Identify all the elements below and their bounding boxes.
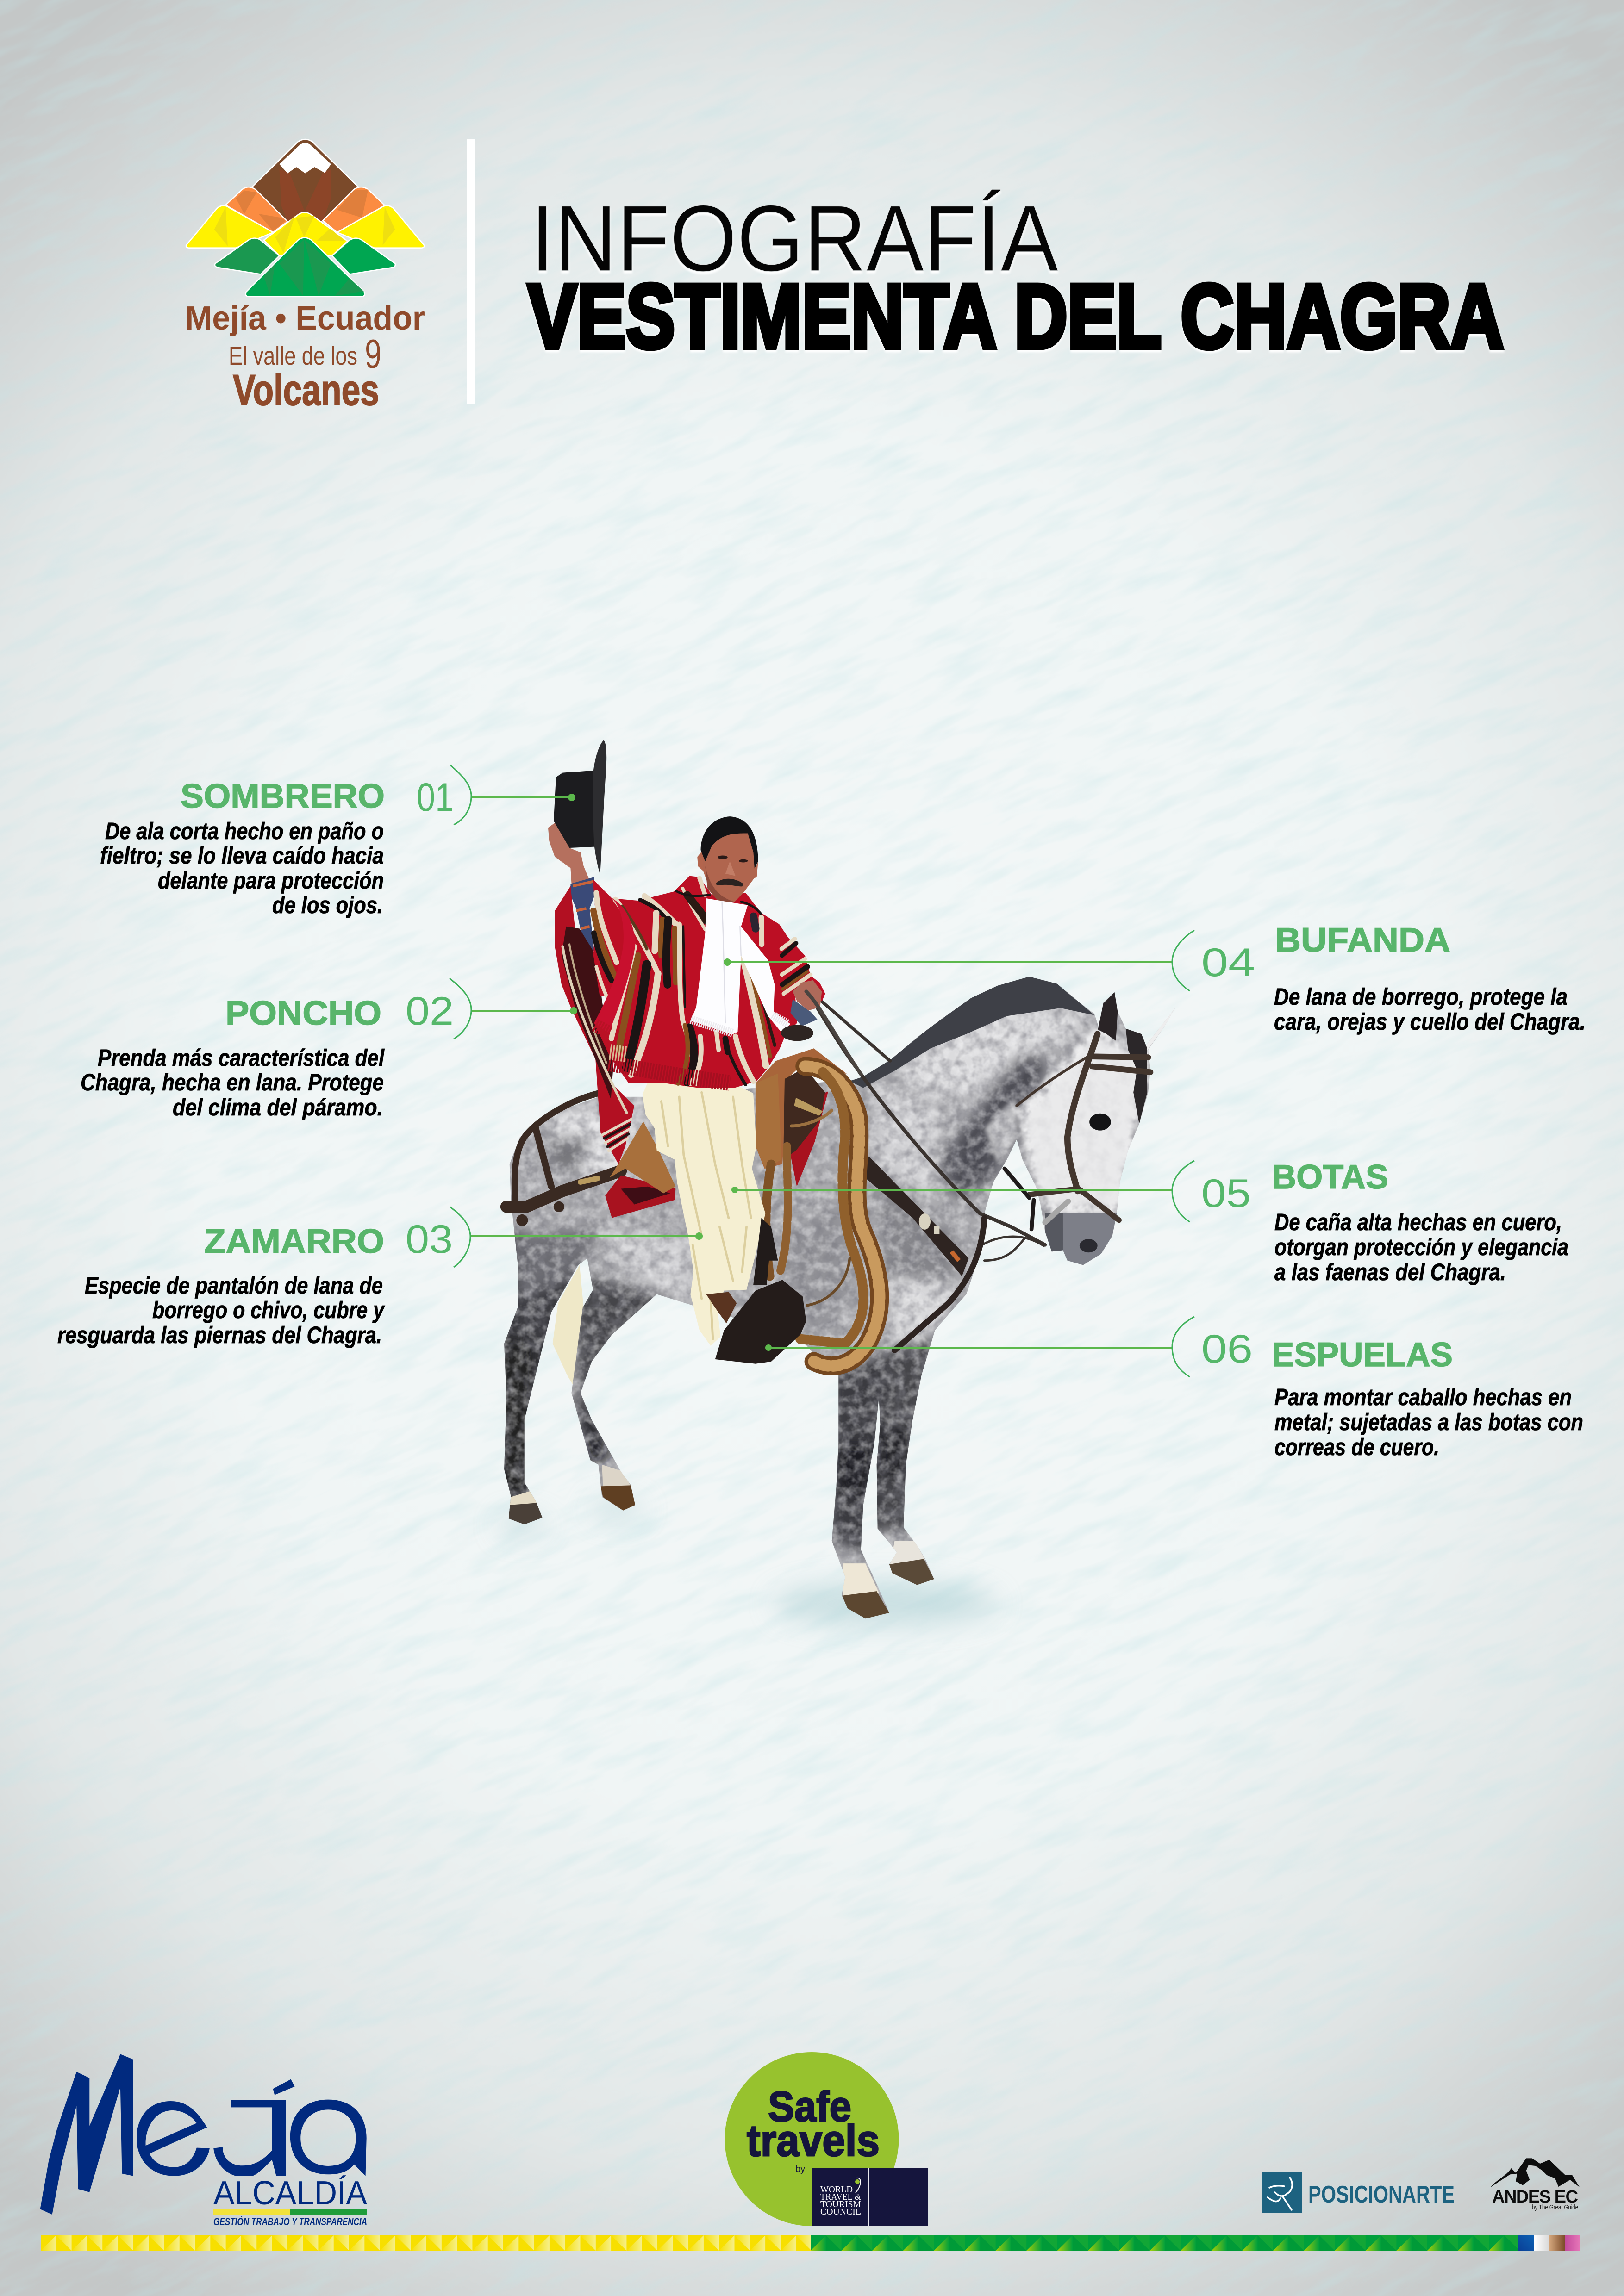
text: by: by [795,2164,805,2174]
title [528,186,1504,367]
collar cord [676,891,761,914]
description: resguarda las piernas del Chagra. [57,1322,382,1348]
description: Prenda más característica del [98,1045,385,1071]
illustration: chagra rider on dapple-grey horse [491,740,1191,1630]
leader line [450,1207,703,1267]
heading: BUFANDA [1275,921,1450,959]
leader line [450,765,575,825]
description: otorgan protección y elegancia [1274,1234,1568,1260]
fetlocks and hooves [510,1489,538,1505]
text: World Travel & Tourism Council [820,2184,861,2217]
number: 03 [406,1217,453,1262]
poncho main body [593,876,825,1088]
text: ALCALDÍA: ALCALDÍA [213,2175,367,2212]
reins [807,991,1045,1261]
logo: Safe Travels WTTC [725,2052,928,2226]
description: borrego o chivo, cubre y [152,1297,385,1323]
number: 06 [1201,1327,1253,1371]
description: De caña alta hechas en cuero, [1274,1209,1562,1235]
mini color bar [213,2209,367,2215]
wordmark Mejía script [40,2054,367,2215]
logo: Andes EC [1491,2158,1580,2211]
divider: white vertical bar [467,139,475,404]
saddle horn [781,1025,813,1041]
text: Volcanes: Volcanes [233,366,379,414]
description [1274,983,1586,1035]
description: Para montar caballo hechas en [1274,1384,1572,1410]
saddle blanket [605,1091,828,1218]
heading: SOMBRERO [181,778,385,815]
description: De lana de borrego, protege la [1274,983,1568,1010]
text: World Travel & Tourism Council: TOURISM [820,2199,861,2209]
text: World Travel & Tourism Council: TRAVEL & [820,2192,861,2202]
horse mane [850,977,1094,1088]
callout 05: botas [731,1158,1568,1285]
head [697,816,758,902]
description: fieltro; se lo lleva caído hacia [100,842,384,869]
callout 04: bufanda [724,921,1586,1035]
boot and stirrup [706,1218,806,1364]
color strip bar [41,2235,1580,2251]
description: delante para protección [158,867,384,894]
heading: ZAMARRO [204,1223,384,1260]
callout 06: espuelas [765,1317,1583,1460]
description [1274,1384,1583,1460]
text: World Travel & Tourism Council: WORLD [820,2184,853,2195]
raised arm and hand [548,821,595,951]
text: Safe: Safe [768,2083,851,2130]
text: ANDES EC: ANDES EC [1492,2187,1578,2207]
poncho back wedge [555,886,634,1164]
horse forelock and ear [1098,992,1175,1124]
leader line [731,1161,1194,1222]
horse and tack [491,967,1191,1630]
number: 02 [406,989,454,1033]
number: 05 [1201,1171,1251,1216]
crupper straps [506,1093,621,1226]
callout 03: zamarro [57,1207,703,1348]
green circle [725,2052,899,2226]
horse body [491,967,1191,1630]
text: tagline: GESTIÓN TRABAJO Y TRANSPARENCIA [213,2216,367,2228]
heading: PONCHO [225,995,381,1032]
logo: Mejía Alcaldía [40,2054,367,2228]
title line: INFOGRAFÍA: INFOGRAFÍA [531,186,1058,291]
number: 04 [1201,940,1255,985]
leader line [765,1317,1194,1377]
icon: WTTC swoosh [855,2178,861,2193]
leader line [724,930,1194,991]
icon: climber box [1262,2172,1302,2213]
text: travels: travels [747,2116,880,2165]
number: 01 [417,775,454,820]
poncho fringes [595,1025,730,1083]
leader line [450,978,577,1039]
callout 01: sombrero [100,765,575,918]
navy boxes [812,2168,928,2226]
description [81,1045,385,1120]
text: POSICIONARTE: POSICIONARTE [1308,2181,1455,2208]
text: World Travel & Tourism Council: COUNCIL [820,2207,861,2217]
breast strap and girth [860,1151,984,1350]
horse muzzle and eye [1045,1114,1117,1265]
ground shadows [498,1500,998,1626]
text: by The Great Guide: by The Great Guide [1532,2203,1578,2211]
rope coil [766,1066,880,1366]
logo: Posicionarte [1262,2172,1455,2213]
scarf [691,898,790,1034]
hat [554,740,606,875]
description: del clima del páramo. [173,1094,383,1120]
right hand [790,980,822,1026]
icon: mountain range [1491,2158,1580,2187]
rein in hand [806,991,861,1075]
brown fur chaps back [610,1073,781,1193]
description [57,1272,385,1348]
description: Chagra, hecha en lana. Protege [81,1069,384,1095]
description [1274,1209,1568,1285]
bridle [1005,1034,1150,1229]
poncho stripes [593,878,811,1084]
rider [548,740,861,1164]
text: Mejía Ecuador: Mejía • Ecuador [185,300,425,337]
description [100,818,384,918]
zamarro: cream fur chaps [643,1083,765,1346]
description: Especie de pantalón de lana de [85,1272,383,1299]
description: correas de cuero. [1274,1434,1439,1460]
callout 02: poncho [81,978,577,1120]
description: de los ojos. [272,892,383,918]
horse tail [553,1265,584,1397]
description: De ala corta hecho en paño o [105,818,384,844]
logo: Mejía Ecuador valle de los 9 volcanes [185,139,425,414]
text: El valle de los: El valle de los [229,341,357,370]
heading: BOTAS [1272,1158,1388,1196]
description: a las faenas del Chagra. [1274,1259,1506,1285]
poncho red fold [594,898,636,1033]
heading: ESPUELAS [1272,1336,1453,1374]
saddle leather [756,1048,848,1169]
icon: volcano mountains [186,139,424,297]
text: 9: 9 [365,331,381,377]
